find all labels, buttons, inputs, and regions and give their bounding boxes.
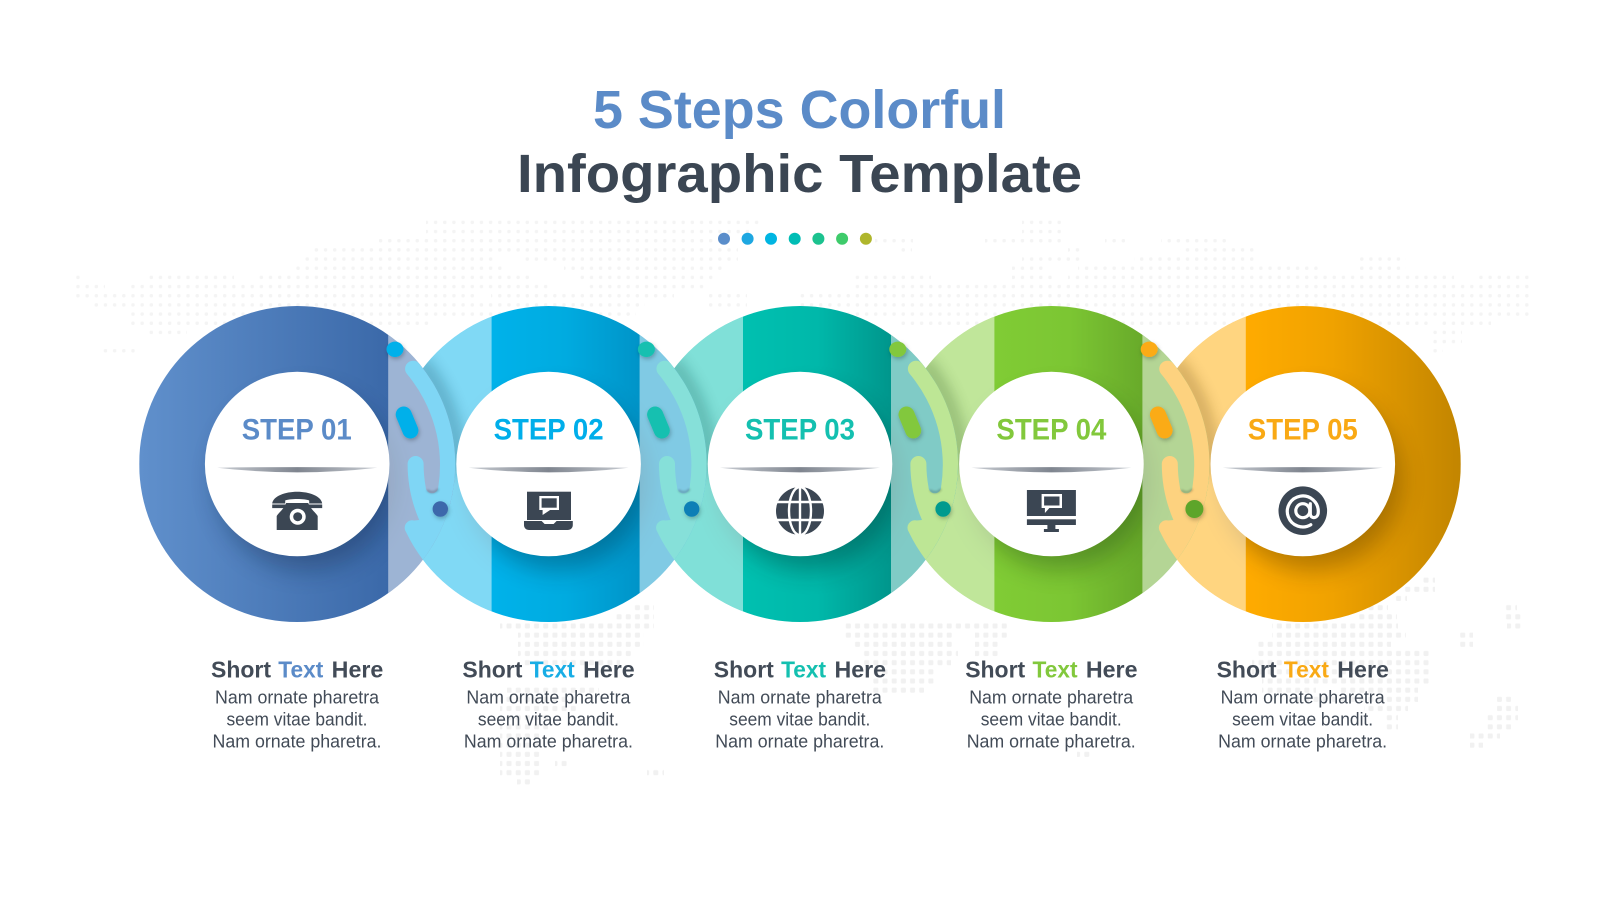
text block: step 05 — [1217, 657, 1389, 751]
text block: step 05: Here — [1337, 657, 1389, 683]
dotted world map background — [73, 218, 1529, 786]
text block: step 05: Nam ornate pharetra — [1221, 687, 1386, 707]
text block: step 03: Short — [714, 657, 774, 683]
text block: step 02: seem vitae bandit. — [478, 709, 619, 729]
text block: step 03: Nam ornate pharetra. — [715, 731, 884, 751]
text block: step 02: Text — [530, 657, 575, 683]
text block: step 05: seem vitae bandit. — [1232, 709, 1373, 729]
text block: step 01: Here — [332, 657, 383, 683]
text block: step 04 — [965, 657, 1138, 751]
text block: step 02 — [462, 657, 635, 751]
connector: step 04 to step 05 — [1141, 342, 1209, 560]
text block: step 02: Here — [583, 657, 635, 683]
panel: step 05 circle — [1177, 306, 1461, 622]
text block: step 01: Text — [278, 657, 324, 683]
text block: step 05: Short — [1217, 657, 1277, 683]
icon: laptop with chat bubble — [524, 492, 573, 530]
connector: step 03 to step 04 — [889, 342, 958, 560]
text block: step 01 — [211, 657, 383, 751]
text block: step 02: Nam ornate pharetra. — [464, 731, 633, 751]
title — [517, 80, 1082, 204]
text block: step 01: seem vitae bandit. — [226, 709, 368, 729]
text block: step 04: Nam ornate pharetra. — [967, 731, 1136, 751]
text block: step 04: Nam ornate pharetra — [969, 687, 1134, 707]
panel: step 02 circle: STEP 02 — [494, 413, 604, 446]
panel: step 03 circle: STEP 03 — [745, 413, 855, 446]
text block: step 02: Short — [462, 657, 523, 683]
text block: step 01: Short — [211, 657, 271, 683]
decorative dot row — [718, 233, 872, 245]
text block: step 03: Here — [834, 657, 886, 683]
icon: telephone — [272, 492, 322, 530]
panel: step 01 circle: STEP 01 — [242, 413, 352, 446]
text block: step 05: Text — [1284, 657, 1329, 683]
panel: step 05 circle: STEP 05 — [1248, 413, 1358, 446]
title: 5 Steps Colorful — [593, 80, 1006, 140]
text block: step 05: Nam ornate pharetra. — [1218, 731, 1387, 751]
connector: step 01 to step 02 — [386, 342, 455, 560]
panel: step 04 circle: STEP 04 — [996, 413, 1107, 446]
text block: step 04: Here — [1086, 657, 1137, 683]
text block: step 03: Nam ornate pharetra — [718, 687, 883, 707]
text block: step 04: seem vitae bandit. — [981, 709, 1122, 729]
connector: step 02 to step 03 — [638, 342, 707, 560]
text block: step 03: seem vitae bandit. — [729, 709, 870, 729]
panel: step 01 circle — [139, 306, 455, 622]
text block: step 04: Short — [965, 657, 1026, 683]
text block: step 03 — [714, 657, 886, 751]
text block: step 04: Text — [1032, 657, 1078, 683]
panel: step 02 circle — [423, 306, 706, 622]
text block: step 01: Nam ornate pharetra — [215, 687, 380, 707]
text block: step 01: Nam ornate pharetra. — [212, 731, 382, 751]
panel: step 04 circle — [926, 306, 1210, 622]
text block: step 02: Nam ornate pharetra — [466, 687, 631, 707]
icon: desktop monitor — [1027, 490, 1076, 532]
icon: globe — [776, 487, 824, 535]
text block: step 03: Text — [781, 657, 826, 683]
title: Infographic Template — [517, 144, 1082, 204]
icon: at sign — [1278, 486, 1327, 535]
panel: step 03 circle — [674, 306, 958, 622]
